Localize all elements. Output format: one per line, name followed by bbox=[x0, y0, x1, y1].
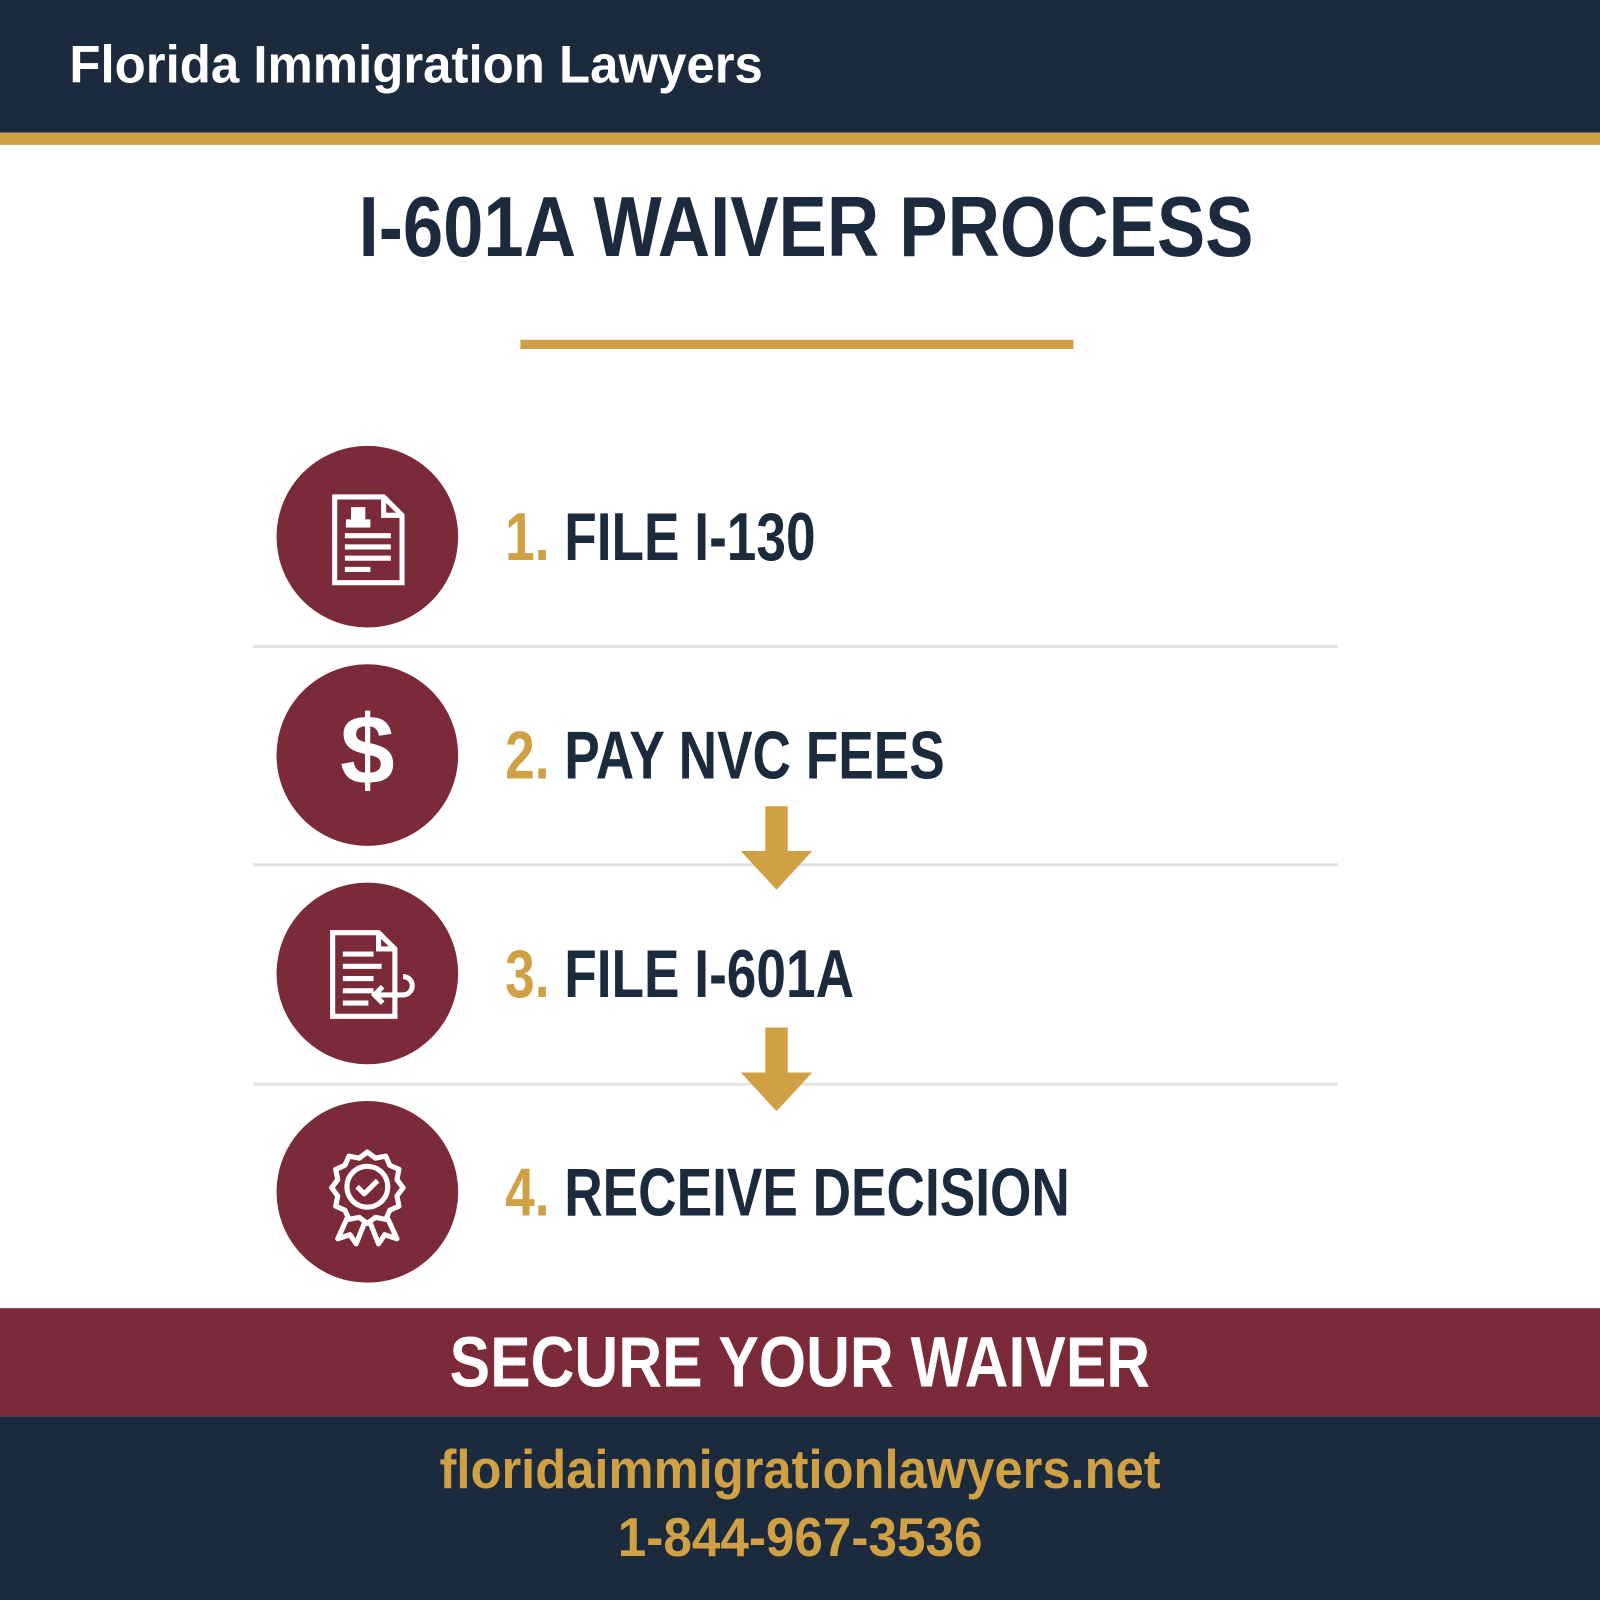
step 3 label: 3. FILE I-601A bbox=[505, 936, 854, 1011]
step 1 label: 1. FILE I-130 bbox=[505, 499, 816, 574]
title underline bbox=[520, 340, 1073, 349]
icon: document (step 1) bbox=[277, 446, 458, 628]
step 2 label: 2. PAY NVC FEES bbox=[505, 717, 945, 793]
gold stripe bbox=[0, 133, 1600, 145]
step 4 label: 4. RECEIVE DECISION bbox=[505, 1154, 1070, 1230]
arrow 2 bbox=[741, 1028, 812, 1112]
arrow 1 bbox=[741, 806, 812, 890]
header brand text: Florida Immigration Lawyers bbox=[69, 36, 763, 95]
header bar bbox=[0, 0, 1600, 133]
phone: 1-844-967-3536 bbox=[618, 1507, 982, 1568]
icon: dollar (step 2): $ bbox=[340, 695, 395, 805]
footer bbox=[0, 1416, 1600, 1600]
icon: document with arrow (step 3) bbox=[277, 883, 458, 1064]
call to action band bbox=[0, 1308, 1600, 1416]
title: I-601A WAIVER PROCESS bbox=[359, 179, 1254, 274]
CTA text: SECURE YOUR WAIVER bbox=[450, 1322, 1150, 1402]
website: floridaimmigrationlawyers.net bbox=[439, 1439, 1161, 1500]
icon: award badge (step 4) bbox=[277, 1101, 458, 1283]
icon: dollar (step 2) bbox=[277, 664, 458, 846]
